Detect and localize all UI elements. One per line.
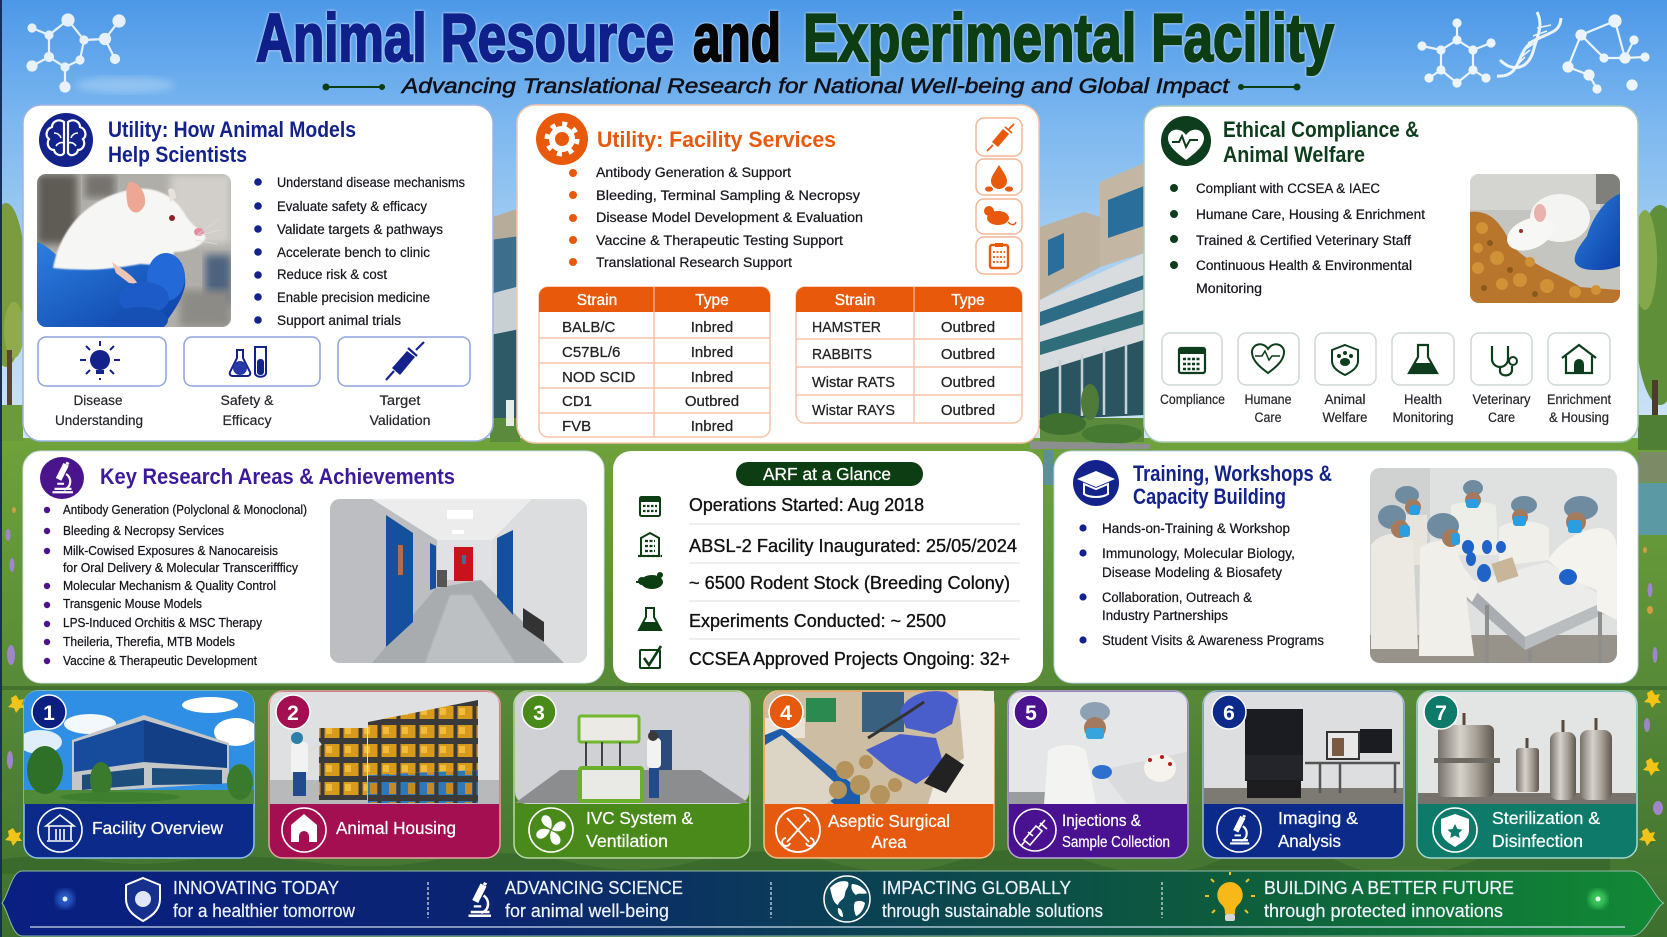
tree: left edge: [0, 203, 26, 441]
icon tile: humane care: Care: [1254, 410, 1282, 425]
list: training: Hands-on-Training & Workshop: [1102, 521, 1290, 536]
slogan: building a better future: [1205, 872, 1514, 921]
icon tile: compliance: Compliance: [1160, 392, 1225, 407]
table: strains left: NOD SCID: [562, 369, 636, 386]
feature: disease understanding: Disease: [74, 393, 122, 408]
number badge 7: [1424, 695, 1458, 729]
slogan: innovating today: INNOVATING TODAY: [173, 878, 339, 898]
table: strains right: Outbred: [941, 402, 995, 419]
label: [828, 811, 950, 852]
slogan: advancing science: [468, 878, 683, 921]
table: strains right: Type: [951, 292, 985, 309]
photo: building exterior: [18, 691, 258, 804]
number badge 3: 3: [533, 702, 545, 725]
list: how animal models help: Validate targets & pathways: [277, 222, 443, 237]
table: strains right: [796, 287, 1022, 423]
table: strains right: Strain: [835, 292, 875, 309]
subtitle: Advancing Translational Research for National Well-being and Global Impact: [400, 74, 1230, 98]
panel: key research areas: [23, 451, 604, 683]
list: services: Disease Model Development & Evaluation: [596, 210, 863, 225]
number badge 2: [276, 695, 310, 729]
label: [1492, 808, 1600, 851]
panel: ARF at a glance: [613, 451, 1043, 683]
table: strains left: Inbred: [691, 418, 733, 435]
heading: Help Scientists: [108, 142, 247, 167]
table: strains left: BALB/C: [562, 319, 616, 336]
feature: target validation: Target: [380, 393, 421, 408]
icon: heart pulse: [1161, 116, 1211, 166]
icon: rodent: [976, 199, 1022, 234]
icon: microscope: [1217, 808, 1261, 852]
number badge 7: 7: [1435, 702, 1447, 725]
label: Ventilation: [586, 831, 668, 851]
list: training: Immunology, Molecular Biology,: [1102, 546, 1295, 561]
sparkle right: [1589, 890, 1607, 908]
list: services: Translational Research Support: [596, 255, 792, 270]
list: training: [1079, 521, 1324, 648]
icon: microscope: [40, 457, 84, 499]
list: training: Collaboration, Outreach &: [1102, 590, 1252, 605]
icon tile: humane care: [1238, 333, 1299, 425]
banner: bottom slogans: [2, 871, 1664, 936]
list: research areas: Bleeding & Necropsy Services: [63, 524, 224, 538]
molecule decoration: left: [28, 14, 124, 92]
photo: white rat on blue glove: [37, 174, 231, 333]
icon: animal house: [282, 808, 326, 852]
table: strains left: Inbred: [691, 319, 733, 336]
table: strains left: Outbred: [685, 393, 739, 410]
table: strains right: Wistar RAYS: [812, 402, 895, 419]
feature: disease understanding: Understanding: [55, 413, 143, 428]
icon tile: animal welfare: [1315, 333, 1376, 425]
back row people: [1406, 515, 1427, 565]
label: Area: [872, 832, 907, 852]
label: [1062, 811, 1170, 851]
photo: corridor: [330, 499, 587, 663]
feature: target validation: Validation: [370, 413, 430, 428]
list: how animal models help: Enable precision medicine: [277, 290, 430, 305]
photo: imaging equipment: [1204, 692, 1403, 804]
title: Experimental Facility: [803, 0, 1334, 76]
photo: injection: [1009, 692, 1187, 804]
table: strains right: Outbred: [941, 374, 995, 391]
icon: clipboard: [976, 237, 1022, 274]
table: strains right: Outbred: [941, 319, 995, 336]
row: rodent stock: ~ 6500 Rodent Stock (Breeding Colony): [689, 572, 1010, 593]
table: strains left: FVB: [562, 418, 591, 435]
feature: safety and efficacy: Efficacy: [222, 413, 272, 428]
table: strains right: Outbred: [941, 346, 995, 363]
title: [256, 0, 1334, 76]
list: training: Student Visits & Awareness Programs: [1102, 633, 1324, 648]
front left person: [1371, 534, 1418, 649]
card 7: sterilization: [1417, 691, 1637, 858]
photo: cage racks: [270, 692, 499, 804]
icon: graduation cap: [1073, 460, 1119, 506]
table: strains left: Inbred: [691, 344, 733, 361]
heading: Utility: Facility Services: [597, 127, 836, 152]
icon: gear: [536, 113, 588, 165]
number badge 5: [1014, 695, 1048, 729]
icon tile: humane care: Humane: [1244, 392, 1292, 407]
slogan: innovating today: [126, 878, 356, 921]
label: Injections &: [1062, 811, 1142, 830]
list: research areas: Milk-Cowised Exposures & Nanocareisis: [63, 544, 278, 558]
list: how animal models help: Accelerate bench to clinic: [277, 245, 430, 260]
photo: rat on feed pellets: [1470, 174, 1620, 303]
list: compliance: [1170, 181, 1425, 296]
list: research areas: Antibody Generation (Polyclonal & Monoclonal): [63, 503, 307, 517]
list: research areas: for Oral Delivery & Molecular Transceriffficy: [63, 561, 299, 575]
badge: ARF at a glance: ARF at a Glance: [763, 464, 891, 484]
label: Imaging &: [1278, 808, 1358, 828]
list: how animal models help: Understand disease mechanisms: [277, 175, 465, 190]
number badge 1: 1: [43, 702, 55, 725]
icon tile: enrichment and housing: & Housing: [1549, 410, 1609, 425]
card 3: IVC system: [514, 691, 750, 858]
badge: ARF at a glance: [736, 462, 923, 486]
slogan: impacting globally: [824, 876, 1103, 922]
number badge 6: 6: [1223, 702, 1235, 725]
list: how animal models help: [254, 175, 465, 328]
list: services: [569, 165, 863, 270]
panel: training and capacity building: [1054, 451, 1638, 683]
list: research areas: Transgenic Mouse Models: [63, 597, 202, 611]
label: [1278, 808, 1358, 851]
water and paths: [1043, 450, 1667, 535]
list: training: Disease Modeling & Biosafety: [1102, 565, 1282, 580]
heading: [1133, 461, 1332, 509]
row: experiments conducted: Experiments Conducted: ~ 2500: [689, 610, 946, 631]
list: research areas: Molecular Mechanism & Quality Control: [63, 579, 276, 593]
number badge 1: [32, 695, 66, 729]
heading: Capacity Building: [1133, 484, 1286, 509]
heading: Utility: How Animal Models: [108, 117, 356, 142]
icon tile: veterinary care: Veterinary: [1472, 392, 1531, 407]
heading: Ethical Compliance &: [1223, 117, 1419, 142]
icon tile: health monitoring: Health: [1404, 392, 1442, 407]
title: Animal Resource: [256, 0, 674, 76]
icon: surgical tools: [776, 808, 820, 852]
photo: steel tanks: [1418, 692, 1636, 804]
list: compliance: Continuous Health & Environmental: [1196, 258, 1412, 273]
photo: training session: [1370, 468, 1617, 663]
icon tile: compliance: [1160, 333, 1225, 407]
list: compliance: Monitoring: [1196, 281, 1262, 296]
icon tile: animal welfare: Animal: [1324, 392, 1366, 407]
table: strains left: C57BL/6: [562, 344, 620, 361]
title: and: [693, 0, 781, 76]
list: how animal models help: Reduce risk & cost: [277, 267, 387, 282]
slogan: building a better future: through protected innovations: [1264, 901, 1503, 921]
slogan: innovating today: for a healthier tomorrow: [173, 901, 356, 921]
table: strains left: Strain: [577, 292, 617, 309]
card 6: imaging: [1203, 691, 1404, 858]
table: [1474, 562, 1597, 637]
number badge 4: [769, 695, 803, 729]
list: research areas: [44, 503, 307, 668]
icon tile: enrichment and housing: Enrichment: [1547, 392, 1611, 407]
heading: Key Research Areas & Achievements: [100, 464, 455, 489]
list: services: Antibody Generation & Support: [596, 165, 791, 180]
table: strains left: Inbred: [691, 369, 733, 386]
icon: ventilation fan: [529, 808, 573, 852]
wildflowers: [0, 507, 1667, 876]
list: research areas: LPS-Induced Orchitis & MSC Therapy: [63, 616, 263, 630]
table: strains right: Wistar RATS: [812, 374, 895, 391]
list: compliance: Compliant with CCSEA & IAEC: [1196, 181, 1380, 196]
card 4: aseptic surgical area: [764, 691, 994, 858]
table: strains right: HAMSTER: [812, 319, 881, 336]
icon tile: animal welfare: Welfare: [1322, 410, 1368, 425]
number badge 3: [522, 695, 556, 729]
icon: brain: [39, 113, 93, 167]
list: services: Vaccine & Therapeutic Testing Support: [596, 233, 843, 248]
feature: target validation: [338, 337, 470, 428]
icon: shield star: [1433, 808, 1477, 852]
heading: Training, Workshops &: [1133, 461, 1332, 486]
icon tile: health monitoring: [1392, 333, 1454, 425]
heading: [1223, 117, 1419, 167]
number badge 4: 4: [780, 702, 792, 725]
list: training: Industry Partnerships: [1102, 608, 1228, 623]
heading: Animal Welfare: [1223, 142, 1365, 167]
slogan: advancing science: for animal well-being: [505, 901, 669, 921]
panel: facility services: [517, 105, 1039, 443]
label: Disinfection: [1492, 831, 1583, 851]
list: compliance: Humane Care, Housing & Enrichment: [1196, 207, 1425, 222]
table: strains left: [539, 287, 770, 437]
label: [586, 808, 693, 851]
list: services: Bleeding, Terminal Sampling & Necropsy: [596, 188, 860, 203]
number badge 2: 2: [287, 702, 299, 725]
row: operations started: Operations Started: Aug 2018: [689, 494, 924, 515]
right person: [1548, 528, 1617, 620]
icon: building: [38, 808, 82, 852]
number badge 6: [1212, 695, 1246, 729]
heading: [108, 117, 356, 167]
icon tile: enrichment and housing: [1547, 333, 1611, 425]
icon: syringe: [976, 118, 1022, 156]
list: compliance: Trained & Certified Veterinary Staff: [1196, 233, 1411, 248]
building: left gap: [490, 208, 520, 442]
label: Sterilization &: [1492, 808, 1600, 828]
slogan: impacting globally: IMPACTING GLOBALLY: [882, 878, 1071, 898]
label: IVC System &: [586, 808, 693, 828]
feature: disease understanding: [38, 337, 166, 428]
icon tile: veterinary care: Care: [1488, 410, 1515, 425]
list: how animal models help: Support animal trials: [277, 313, 401, 328]
slogan: building a better future: BUILDING A BETTER FUTURE: [1264, 878, 1514, 898]
sparkle left: [56, 890, 74, 908]
label: Analysis: [1278, 831, 1341, 851]
gloves and box: [1462, 540, 1577, 585]
table: strains left: Type: [695, 292, 729, 309]
label: Sample Collection: [1062, 834, 1170, 851]
table: strains left: CD1: [562, 393, 592, 410]
front center person: [1419, 541, 1480, 656]
building: right gap: [1030, 163, 1150, 449]
card 5: injections: [1008, 691, 1188, 858]
label: Aseptic Surgical: [828, 811, 950, 831]
icon: syringe: [1014, 809, 1056, 851]
panel: how animal models help scientists: [23, 105, 493, 441]
panel: ethical compliance: [1144, 106, 1638, 442]
row: approved projects: CCSEA Approved Projects Ongoing: 32+: [689, 648, 1010, 669]
list: how animal models help: Evaluate safety & efficacy: [277, 199, 427, 214]
slogan: advancing science: ADVANCING SCIENCE: [505, 878, 683, 898]
label: Facility Overview: [92, 818, 223, 838]
row: ABSL-2 facility: ABSL-2 Facility Inaugurated: 25/05/2024: [689, 535, 1017, 556]
number badge 5: 5: [1025, 702, 1037, 725]
list: research areas: Vaccine & Therapeutic Development: [63, 654, 258, 668]
photo: IVC unit: [515, 692, 749, 804]
feature icons row: [1160, 333, 1611, 425]
feature: safety and efficacy: [184, 337, 320, 428]
tree: right edge: [1633, 205, 1667, 450]
icon tile: health monitoring: Monitoring: [1392, 410, 1454, 425]
label: Animal Housing: [336, 818, 456, 838]
photo: surgery: [765, 691, 994, 805]
molecule and DNA decoration: right: [1418, 12, 1648, 92]
icon: blood drop: [976, 159, 1022, 195]
slogan: impacting globally: through sustainable solutions: [882, 901, 1103, 921]
card 2: animal housing: [269, 691, 500, 858]
table: strains right: RABBITS: [812, 346, 872, 363]
feature: safety and efficacy: Safety &: [220, 393, 274, 408]
card 1: facility overview: [18, 691, 258, 858]
list: research areas: Theileria, Therefia, MTB Models: [63, 635, 235, 649]
icon tile: veterinary care: [1471, 333, 1532, 425]
